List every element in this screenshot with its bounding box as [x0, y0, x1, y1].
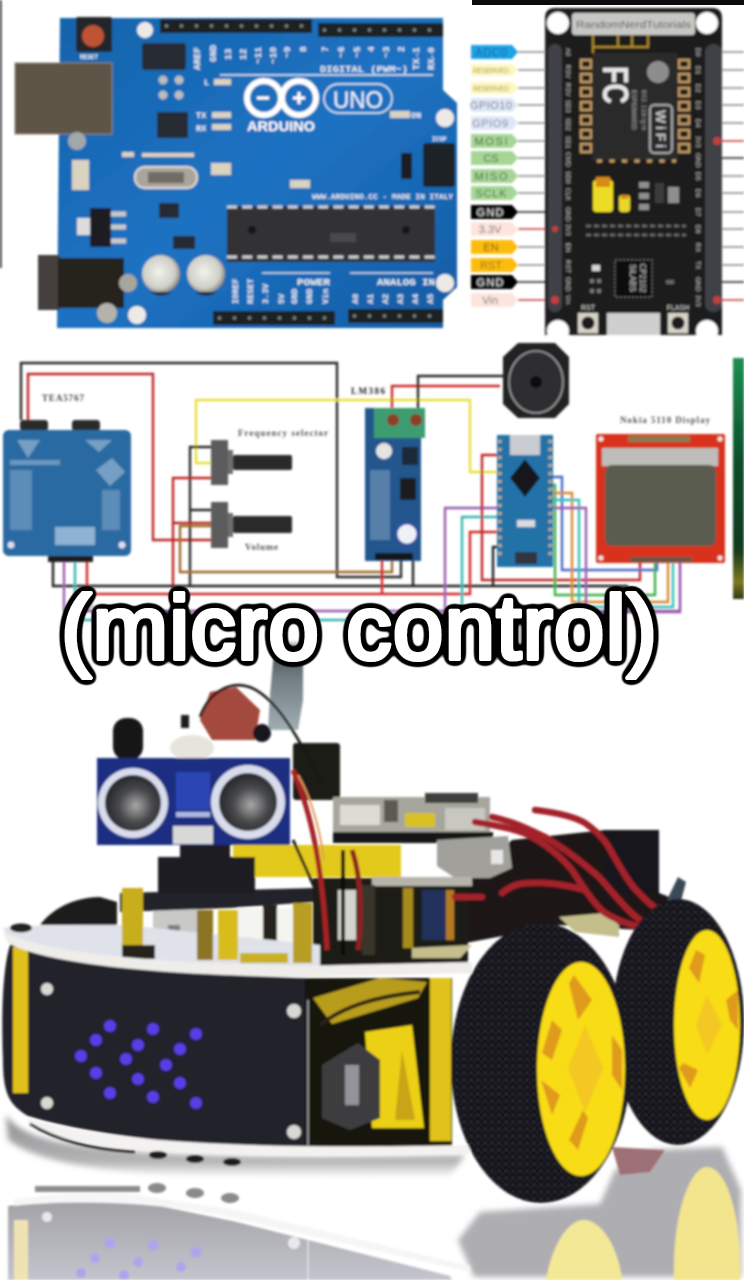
- power and analog pin labels: [231, 278, 436, 304]
- digital pin labels: ~3: [381, 46, 392, 58]
- servo horn and sensor wiring: [170, 685, 322, 782]
- small components: [72, 79, 410, 190]
- top plate surface: [3, 925, 320, 970]
- JP2 pads: [158, 76, 184, 100]
- Arduino logo: ARDUINO: [247, 119, 315, 134]
- pin label GND: GND: [476, 277, 504, 289]
- pin label GPIO10: GPIO10: [470, 100, 512, 112]
- power and analog pin labels: IOREF: [231, 278, 241, 304]
- top plate white rim: [3, 932, 472, 977]
- side pin names: D6: [694, 189, 701, 198]
- line sensors under chassis: [149, 1151, 241, 1166]
- photo: top edge bar: [472, 0, 744, 5]
- reset button: [76, 17, 112, 52]
- yellow gear motor: [365, 1025, 424, 1128]
- power and analog pin labels: A5: [426, 294, 436, 304]
- caption: (micro control): (micro control): [61, 578, 657, 679]
- pin label ADC0: ADC0: [475, 48, 507, 60]
- antenna trace: [593, 35, 648, 55]
- pin label CS: CS: [483, 153, 499, 165]
- panel divider line: [307, 1000, 309, 1146]
- radio module: [3, 420, 131, 562]
- yellow capacitors: [593, 177, 630, 212]
- dark wires in compartment: [320, 992, 420, 1025]
- digital pin labels: 8: [298, 46, 309, 52]
- digital pin labels: ~10: [268, 47, 279, 64]
- reflection: rim highlight: [14, 1193, 470, 1272]
- pin label GND: GND: [476, 207, 504, 219]
- black shell on plate: [40, 897, 117, 925]
- capacitors: [142, 255, 225, 296]
- power and analog pin labels: GND: [290, 289, 300, 304]
- side pin names: GND: [694, 277, 701, 292]
- pin label GPIO9: [471, 116, 518, 130]
- pin label RST: RST: [480, 260, 502, 272]
- pin label MISO: [471, 169, 518, 183]
- red motor wires: [455, 810, 669, 927]
- USB connector: [15, 63, 112, 134]
- digital pin labels: 12: [238, 48, 249, 60]
- side pin names: GND: [564, 207, 571, 222]
- photo: robot car: [2, 640, 744, 1280]
- ultrasonic sensor: [97, 758, 290, 845]
- pin label RESERVED: RESERVED: [473, 68, 509, 75]
- side pin names: GND: [564, 277, 571, 292]
- reflected reddish cable: [612, 1147, 665, 1175]
- crystal: [135, 167, 197, 188]
- side pin names: RSV: [564, 83, 571, 97]
- board outline: [57, 18, 457, 328]
- side compartment: [305, 978, 452, 1148]
- power and analog headings: ANALOG IN: [377, 277, 435, 288]
- power and analog pin labels: A4: [411, 294, 421, 304]
- side pin names: SD1: [564, 136, 571, 149]
- side pin names: D3: [694, 101, 701, 110]
- corner holes: [547, 12, 718, 342]
- RST button: [578, 305, 598, 333]
- side pin names: GND: [694, 153, 701, 168]
- power and analog headings: [262, 273, 435, 288]
- pin label CS: [471, 151, 518, 165]
- LM386 amplifier board: [365, 408, 425, 561]
- board LED labels: TX: [196, 111, 207, 121]
- WiFi module shield: 802.11b/g/n: [640, 90, 646, 130]
- side pin names: D2: [694, 84, 701, 93]
- pin label RESERVED: [471, 64, 518, 76]
- side pin names: [564, 48, 701, 307]
- lower plate rim: [28, 1118, 470, 1156]
- reflection: strut and screws: [14, 1212, 308, 1280]
- mounting holes: [68, 22, 454, 324]
- dashed pad rows: [586, 226, 686, 235]
- middle deck right: [313, 877, 472, 966]
- pin label GPIO9: GPIO9: [472, 118, 508, 130]
- board LED labels: RX: [196, 124, 207, 134]
- silver motor block: [437, 836, 512, 878]
- side pin names: 3V3: [564, 224, 571, 236]
- digital pin labels: 2: [396, 46, 407, 52]
- yellow wire channel: [313, 978, 427, 1024]
- side pin names: D1: [694, 66, 701, 75]
- ICSP header: [401, 143, 455, 187]
- pin label EN: [471, 240, 518, 254]
- pin label MOSI: [471, 134, 518, 148]
- USB bridge chip: [615, 260, 652, 297]
- yellow rear strut: [430, 978, 451, 1141]
- front wheel: [451, 923, 631, 1203]
- digital pin labels: ~11: [253, 47, 264, 64]
- motor can: [322, 1043, 380, 1130]
- board LED labels: ON: [411, 111, 421, 121]
- grey cable behind robot: [268, 640, 303, 730]
- maker label: [572, 13, 695, 35]
- USB port: [607, 313, 660, 335]
- LED arrow matrix: [75, 1020, 202, 1109]
- label: frequency selector: Frequency selector: [238, 428, 328, 438]
- digital pin labels: AREF: [192, 47, 203, 70]
- maker label: RandomNerdTutorials: [576, 19, 691, 31]
- label: LM386: LM386: [351, 386, 386, 396]
- power and analog pin labels: 3.3V: [261, 283, 271, 304]
- power and analog pin labels: GND: [305, 289, 315, 304]
- side pin names: D5: [694, 172, 701, 181]
- pin headers: [160, 19, 443, 325]
- small power parts: [639, 182, 679, 210]
- side pin names: RX: [694, 243, 701, 253]
- side pin names: RSV: [564, 65, 571, 79]
- digital label: DIGITAL (PWM~): [320, 65, 408, 75]
- panel screws: [41, 983, 301, 1139]
- NodeMCU pinout diagram: [470, 8, 744, 342]
- power and analog headings: POWER: [297, 277, 330, 288]
- power and analog pin labels: A1: [366, 294, 376, 304]
- side pin names: EN: [564, 243, 571, 252]
- dark body and front LED panel: [2, 940, 305, 1148]
- side pin names: SD2: [564, 118, 571, 131]
- digital pin labels: RX←0: [426, 47, 437, 70]
- digital pin labels: 4: [366, 46, 377, 52]
- sensor-side parts under deck: [153, 905, 293, 958]
- potentiometer: volume: [211, 502, 292, 548]
- photo: Arduino Uno board: [0, 0, 457, 328]
- pin label RST: [471, 258, 518, 272]
- website line: WWW.ARDUINO.CC - MADE IN ITALY: [312, 194, 454, 202]
- Arduino logo: [247, 81, 316, 134]
- digital pin labels: ~6: [336, 46, 347, 58]
- cropped photo strip at right: [733, 358, 744, 599]
- power and analog pin labels: A3: [396, 294, 406, 304]
- power and analog pin labels: RESET: [246, 278, 256, 304]
- lower plate underside line: [30, 1124, 135, 1152]
- module board: [545, 8, 722, 335]
- UNO badge: UNO: [333, 87, 383, 114]
- header pin marks: [165, 26, 443, 318]
- WiFi module shield: FC: [595, 66, 636, 104]
- cross deck: [120, 888, 313, 912]
- side pin names: SD0: [564, 171, 571, 184]
- circuit wiring diagram: [3, 343, 744, 620]
- black spot on plate: [10, 924, 32, 932]
- pin label 3.3V: [471, 222, 518, 236]
- power and analog pin labels: 5V: [277, 293, 287, 304]
- power jack: [38, 255, 137, 310]
- potentiometer: frequency selector: [211, 440, 292, 485]
- RST button: RST: [581, 305, 596, 312]
- board LED labels: ICSP: [432, 136, 447, 143]
- yellow front strut: [13, 947, 28, 1093]
- power and analog pin labels: Vin: [321, 289, 331, 304]
- rear dark wiring backdrop: [440, 830, 690, 945]
- digital pin labels: 7: [320, 46, 331, 52]
- WiFi module shield: [592, 53, 678, 160]
- rear wheel: [612, 899, 744, 1145]
- speaker: [503, 343, 569, 418]
- pin label MISO: MISO: [474, 171, 508, 183]
- side pin names: D4: [694, 119, 701, 128]
- power and analog pin labels: A0: [351, 294, 361, 304]
- top controller board: [333, 793, 493, 843]
- brass standoffs: [122, 888, 312, 963]
- reflection: wheel hubs: [546, 1167, 740, 1280]
- pin label SCLK: SCLK: [476, 188, 507, 200]
- pin label EN: EN: [483, 242, 499, 254]
- side pad columns: [548, 44, 722, 312]
- FLASH button: [667, 305, 689, 333]
- side pin names: CLK: [564, 188, 571, 201]
- side pin names: CMD: [564, 152, 571, 167]
- module bottom pads: [597, 160, 676, 162]
- label: volume: Volume: [245, 542, 278, 552]
- reflected floor mottling: [458, 1147, 741, 1277]
- WiFi module shield: WiFi: [653, 110, 669, 148]
- yellow control board: [233, 845, 401, 877]
- pin label Vin: Vin: [482, 295, 498, 307]
- rear battery box: [605, 830, 659, 893]
- pin label SCLK: [471, 186, 518, 200]
- side pin names: D8: [694, 225, 701, 234]
- servo mount: [158, 845, 255, 893]
- small SMD parts: [590, 265, 674, 293]
- board LED labels: [80, 54, 447, 143]
- voltage regulator: [77, 208, 126, 247]
- gold module pads: [581, 60, 689, 152]
- label: Nokia display: Nokia 5110 Display: [620, 415, 710, 425]
- black pillar behind sensor: [293, 743, 340, 800]
- pin label Vin: [471, 293, 518, 307]
- WiFi module shield: ESP8266MOD: [630, 90, 636, 131]
- pin label RESERVED: [471, 82, 518, 94]
- side pin names: A0: [564, 48, 571, 56]
- reflection: LED dots: [76, 1238, 202, 1280]
- side pin names: D7: [694, 208, 701, 217]
- pin label MOSI: MOSI: [474, 136, 508, 148]
- grey connector: [667, 877, 686, 905]
- pin label ADC0: [471, 45, 518, 60]
- Arduino Nano: [497, 435, 553, 567]
- brass plates beside wheel: [412, 913, 619, 958]
- FLASH button: FLASH: [667, 305, 689, 312]
- pin label 3.3V: 3.3V: [479, 224, 502, 236]
- reflection: white rim and sensors: [35, 1183, 239, 1203]
- digital pin labels: [192, 45, 437, 70]
- side pin names: 3V3: [694, 295, 701, 307]
- digital pin labels: TX→1: [411, 47, 422, 70]
- microcontroller chip: [227, 206, 435, 262]
- side pin names: 3V3: [694, 136, 701, 148]
- radio module label: TEA5767: [42, 393, 84, 403]
- side pin names: D0: [694, 48, 701, 57]
- pin leader lines: [518, 52, 744, 300]
- side pin names: TX: [694, 261, 701, 270]
- sensor cable bundle: [293, 770, 360, 955]
- IR receiver: [113, 718, 143, 760]
- side pin names: Vin: [564, 295, 571, 305]
- floor shadow under chassis: [6, 1115, 465, 1177]
- power and analog pin labels: A2: [381, 294, 391, 304]
- reflection: chassis: [8, 1200, 452, 1280]
- board LED labels: RESET: [80, 54, 98, 61]
- pin label RESERVED: RESERVED: [473, 86, 509, 93]
- pin label GND: [471, 275, 518, 289]
- side pin names: RST: [564, 260, 571, 273]
- digital pin labels: 13: [223, 48, 234, 60]
- USB bridge chip: CP2102: [638, 264, 647, 293]
- USB bridge chip: SiLABS: [628, 264, 637, 292]
- wires: [21, 363, 680, 620]
- board LED labels: L: [204, 78, 209, 88]
- small chips: [142, 43, 195, 249]
- Nokia 5110 display: [596, 434, 725, 563]
- side pin names: SD3: [564, 100, 571, 113]
- digital pin labels: ~5: [352, 46, 363, 58]
- pin label GND: [471, 205, 518, 219]
- digital pin labels: ~9: [282, 46, 293, 58]
- digital pin labels: GND: [208, 45, 219, 62]
